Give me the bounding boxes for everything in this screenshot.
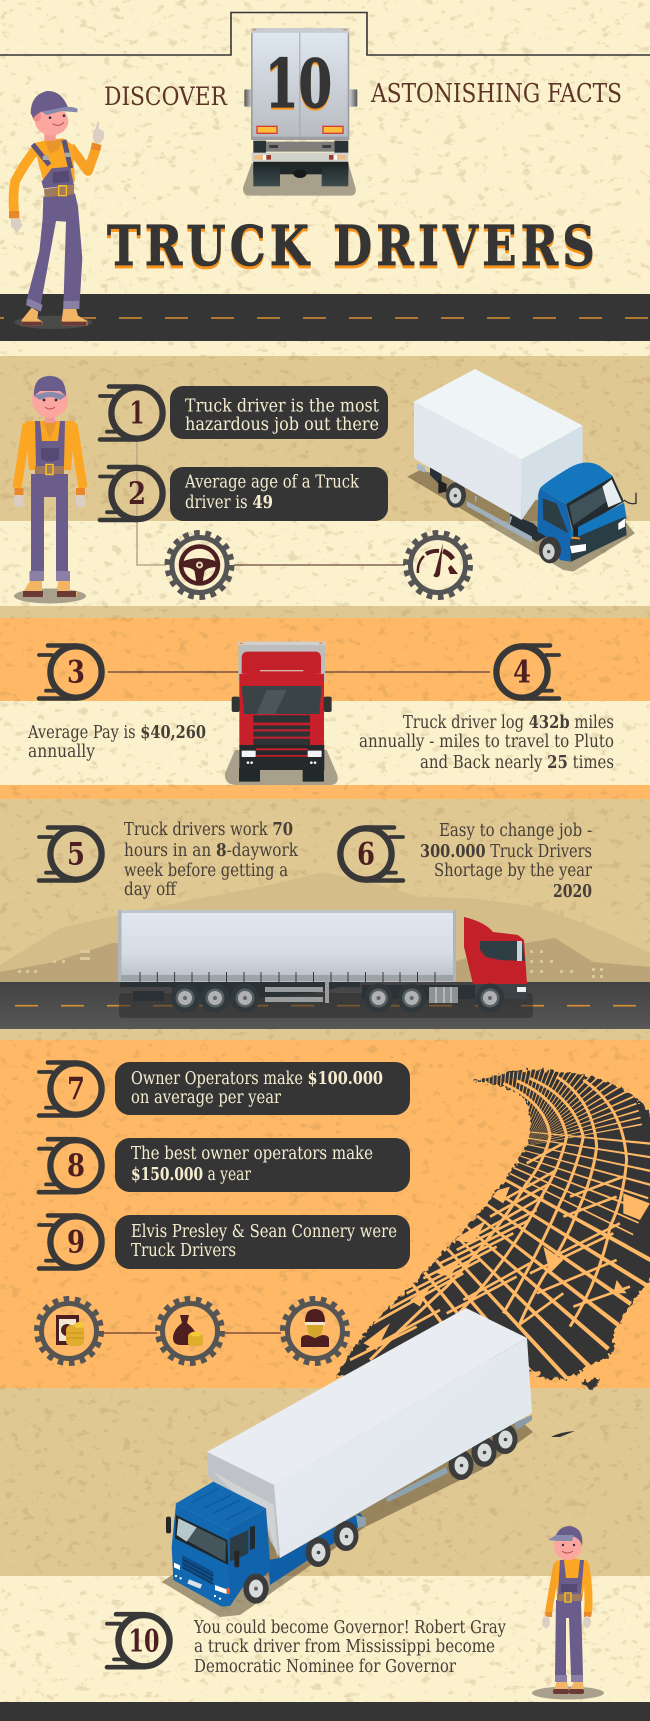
pill: fact 8: $150.000 a year [131,1165,251,1185]
number 10 on truck: 10 [265,47,332,125]
text: fact 10: Democratic Nominee for Governor [194,1657,457,1677]
text: fact 10: a truck driver from Mississippi become [194,1637,495,1657]
character: worker three-quarter view [532,1526,604,1700]
text: fact 4 [359,713,614,773]
panel: facts 5-6 tan band [0,799,650,1040]
truck: blue semi isometric [162,1308,533,1617]
icon: driver person gear [283,1299,347,1363]
badge: number 6: 6 [357,836,375,872]
panel: orange divider band [0,785,650,799]
connector line: steering wheel to gauge [234,564,405,566]
panel: bottom footer bar [0,1702,650,1721]
scenery: near city skyline [0,938,650,985]
pill: fact 9: Truck Drivers [131,1241,236,1261]
panel: facts 3-4 orange band [0,618,650,701]
truck: blue box truck [407,369,636,572]
icon: cash and coins gear [37,1299,101,1363]
connector line: money gears [103,1332,281,1334]
badge: number 10 [107,1614,170,1667]
text: fact 10 [193,1618,506,1677]
text: fact 6: 300.000 Truck Drivers [420,842,592,862]
icon: money bag gear [158,1299,222,1363]
badge: number 7 [39,1062,102,1116]
road: facts 5-6 [0,982,650,1029]
text: fact 4: annually - miles to travel to Pluto [359,732,614,752]
badge: number 9: 9 [67,1224,85,1260]
truck shadow [162,1420,533,1617]
pill: fact 7: on average per year [131,1088,282,1108]
badge: number 10: 10 [128,1624,160,1660]
pill: fact 1 [170,386,388,439]
panel: divider tan band [0,606,650,618]
text: fact 10: You could become Governor! Robert Gray [193,1618,506,1638]
scenery: far mountains [0,872,650,985]
panel: facts 7-9 orange band [0,1040,650,1388]
text: fact 5: Truck drivers work 70 [124,820,293,840]
pill: fact 2: Average age of a Truck [184,472,359,492]
graphic: tire track fragment [551,1431,575,1437]
character: worker pointing up [9,91,104,329]
pill: fact 1: hazardous job out there [185,415,379,435]
icon: speedometer gear [406,533,470,597]
text: fact 5: hours in an 8-daywork [124,841,298,861]
pill: fact 7: Owner Operators make $100.000 [131,1069,383,1089]
badge: number 9 [39,1216,102,1268]
badge: number 6 [340,828,403,880]
pill: fact 7 [115,1062,410,1115]
pill: fact 2: driver is 49 [185,493,273,513]
pill: fact 9 [115,1215,410,1269]
pill: fact 9: Elvis Presley & Sean Connery were [131,1222,397,1242]
heading: discover: DISCOVER [104,82,228,111]
text: fact 5: day off [124,880,177,900]
pill: fact 2 [170,467,388,521]
text: fact 6: Easy to change job - [439,821,592,841]
text: fact 6 [420,821,593,902]
truck: semi side view [118,910,533,1018]
text: fact 5: week before getting a [124,861,288,881]
badge: number 8 [39,1139,102,1192]
badge: number 4: 4 [513,654,531,690]
text: fact 3: annually [28,742,95,762]
text: fact 4: Truck driver log 432b miles [403,713,614,733]
text: fact 6: 2020 [553,882,592,902]
badge: number 3 [39,646,102,698]
text: fact 6: Shortage by the year [434,861,593,881]
graphic: tire tracks [337,1070,650,1392]
badge: number 1 [100,386,163,440]
text: fact 3: Average Pay is $40,260 [27,723,206,743]
icon: steering wheel gear [168,533,232,597]
badge: number 7: 7 [67,1072,85,1108]
badge: number 1: 1 [129,396,145,432]
number 10 on truck: 10 [265,45,332,123]
badge: number 2: 2 [128,476,146,512]
truck cab [166,1482,271,1607]
trailer box [207,1308,527,1485]
badge: number 2 [100,467,163,520]
badge: number 4 [496,646,559,698]
truck: red front view [225,642,338,785]
text: fact 5 [124,820,298,900]
truck rear view [243,28,357,196]
badge: number 5: 5 [67,836,85,872]
pill: fact 8: The best owner operators make [131,1144,373,1164]
badge: number 5 [39,828,102,880]
badge: number 8: 8 [67,1148,85,1184]
road: header [0,294,650,341]
text: fact 4: and Back nearly 25 times [420,753,614,773]
panel: facts 1-2 tan band [0,356,650,521]
text: fact 3 [27,723,206,762]
connector line: badges 3 and 4 [108,671,490,673]
panel: fact 10 tan band [0,1388,650,1576]
connector line: fact 1 to steering wheel [137,441,166,565]
header frame line [0,12,650,55]
badge: number 3: 3 [67,654,85,690]
pill: fact 8 [115,1138,410,1192]
pill: fact 1: Truck driver is the most [185,396,379,416]
character: worker front view [14,376,86,604]
